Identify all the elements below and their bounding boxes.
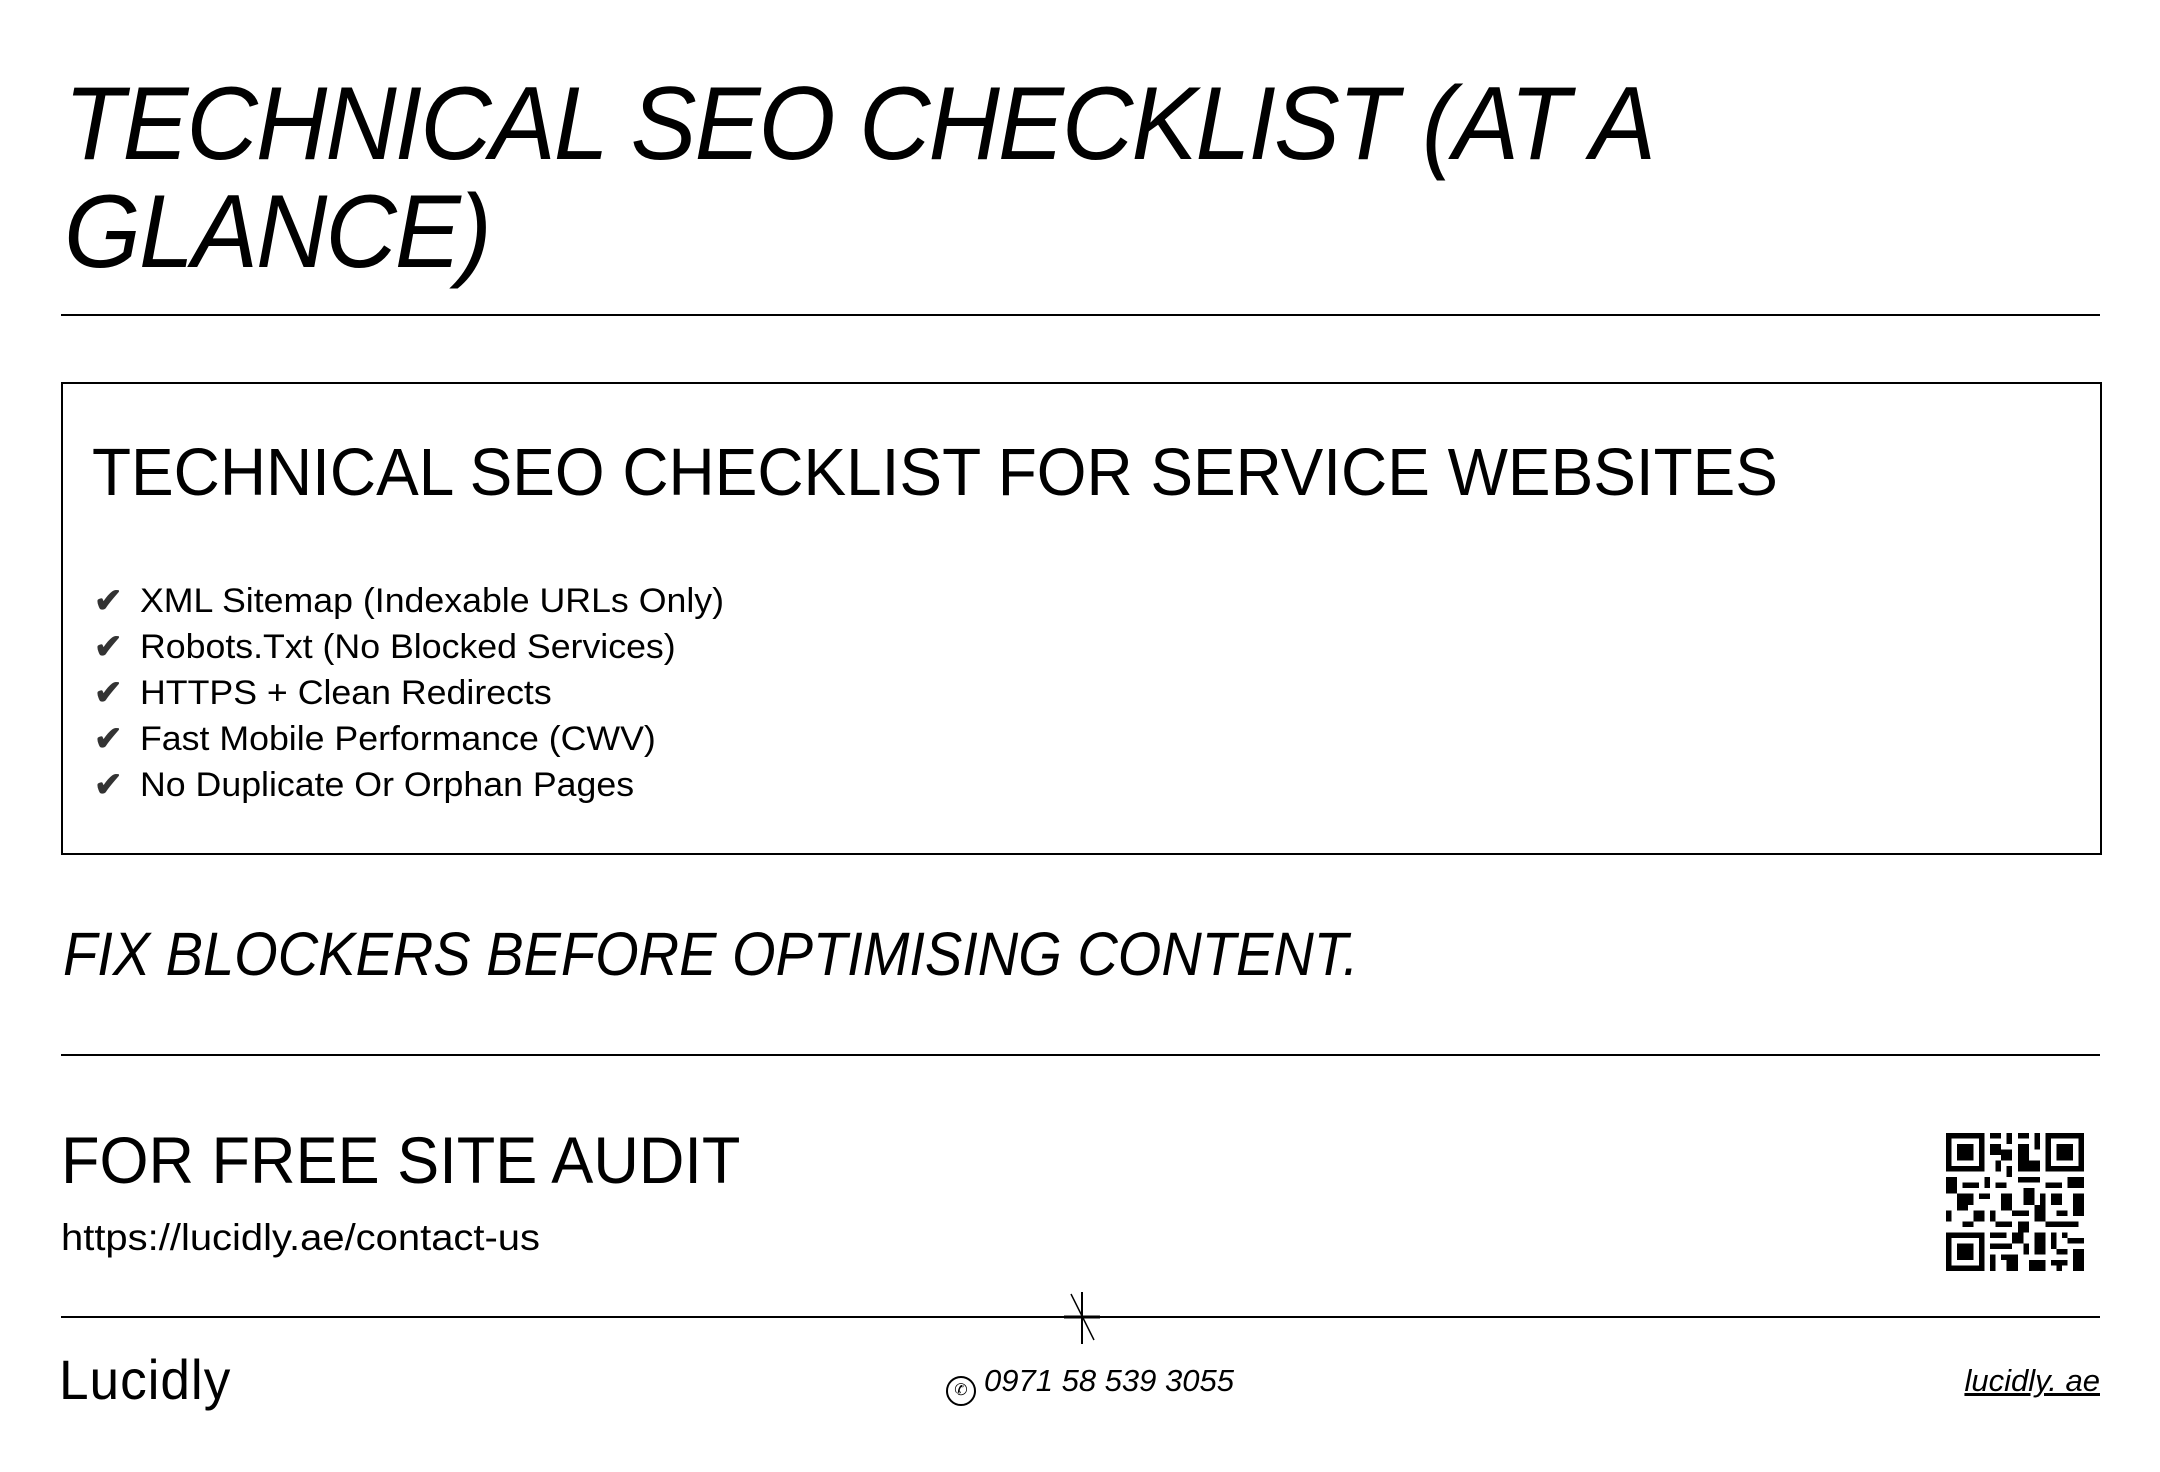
checklist items: Fast Mobile Performance (CWV) — [140, 720, 656, 758]
website link: lucidly. ae — [1964, 1363, 2100, 1398]
checklist items: Robots.Txt (No Blocked Services) — [140, 628, 676, 666]
checklist items: XML Sitemap (Indexable URLs Only) — [140, 582, 724, 620]
checklist items: ✔ — [94, 766, 122, 804]
phone contact: ✆ — [954, 1382, 968, 1399]
tagline: FIX BLOCKERS BEFORE OPTIMISING CONTENT. — [63, 920, 1358, 988]
panel heading: TECHNICAL SEO CHECKLIST FOR SERVICE WEBSITES — [92, 435, 1778, 510]
title: TECHNICAL SEO CHECKLIST (AT A — [64, 66, 1654, 182]
phone contact: 0971 58 539 3055 — [984, 1363, 1234, 1398]
checklist items: ✔ — [94, 628, 122, 666]
logo: Lucidly: Lucidly — [59, 1348, 231, 1411]
panel: checklist — [61, 382, 2102, 855]
checklist items: HTTPS + Clean Redirects — [140, 674, 552, 712]
checklist items: No Duplicate Or Orphan Pages — [140, 766, 634, 804]
checklist items: ✔ — [94, 720, 122, 758]
CTA url: https://lucidly.ae/contact-us — [61, 1217, 540, 1258]
checklist items: ✔ — [94, 674, 122, 712]
icon: QR code — [1946, 1133, 2084, 1271]
title: GLANCE) — [64, 174, 490, 290]
CTA heading: FOR FREE SITE AUDIT — [61, 1123, 740, 1197]
checklist items: ✔ — [94, 582, 122, 620]
checklist items — [94, 582, 724, 804]
icon: star mark — [1064, 1292, 1100, 1344]
title — [64, 66, 1654, 290]
